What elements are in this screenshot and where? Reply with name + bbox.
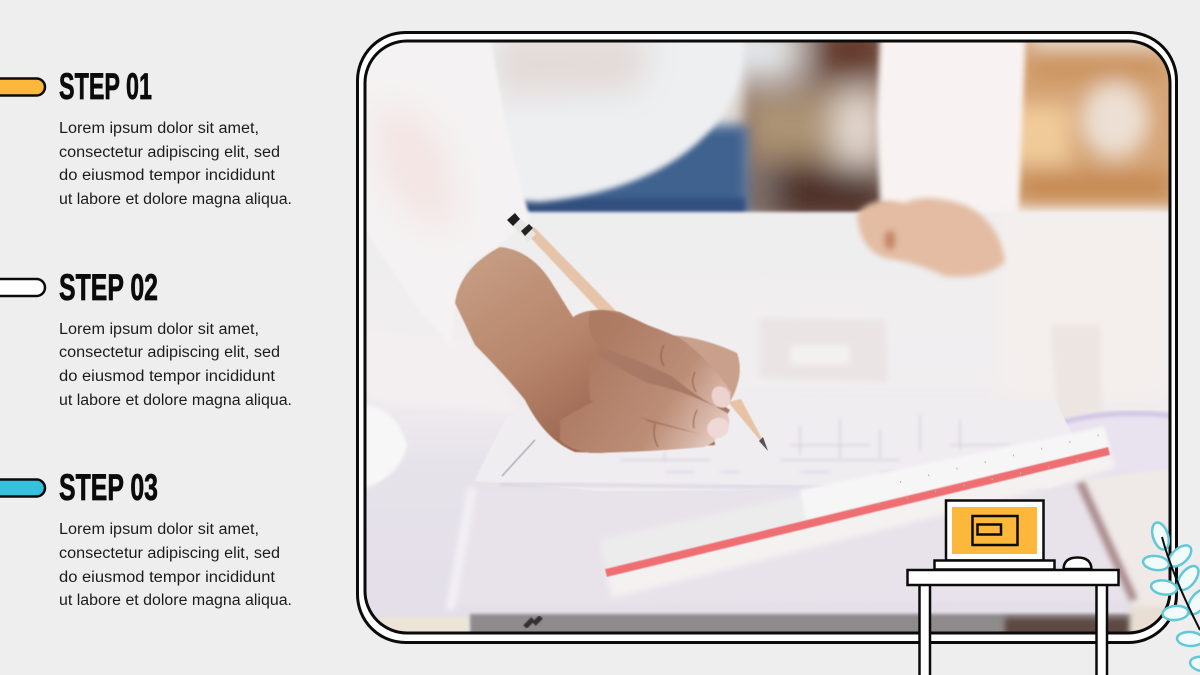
desk legs (920, 584, 1107, 675)
index finger (589, 310, 731, 407)
knuckle creases (654, 345, 697, 447)
inner frame stroke (365, 41, 1170, 633)
forearm and back of hand (455, 247, 715, 453)
torso (506, 42, 743, 206)
photo frame (358, 20, 1180, 642)
step 02 text: do eiusmod tempor incididunt (59, 368, 276, 385)
step 01 heading: STEP 01 (59, 66, 152, 107)
middle finger (590, 365, 730, 437)
step 03 heading: STEP 03 (59, 467, 158, 508)
step 03 text: ut labore et dolore magna aliqua. (59, 592, 292, 609)
step 01 text: Lorem ipsum dolor sit amet, (59, 120, 259, 137)
pencil (507, 213, 768, 451)
step 02 heading: STEP 02 (59, 267, 158, 308)
step 02 text: consectetur adipiscing elit, sed (59, 344, 280, 361)
step 03 pill marker (0, 480, 45, 496)
blurred background room (500, 42, 1168, 214)
laptop base (934, 560, 1054, 570)
mouse (1064, 558, 1092, 569)
ruler (600, 427, 1116, 598)
step 02 text: ut labore et dolore magna aliqua. (59, 392, 292, 409)
rear finger (672, 335, 740, 402)
step 01 text: consectetur adipiscing elit, sed (59, 144, 280, 161)
step 03 text: do eiusmod tempor incididunt (59, 569, 276, 586)
step 01 pill marker (0, 78, 45, 96)
left sheet (365, 330, 520, 412)
step 01 text: ut labore et dolore magna aliqua. (59, 191, 292, 208)
step 02 pill marker (0, 279, 45, 296)
hand (455, 247, 740, 453)
step 03 text (59, 521, 292, 609)
step 01 text (59, 120, 292, 208)
step 02 (0, 267, 292, 409)
drawing sheet (475, 406, 1070, 490)
laptop screen (946, 500, 1044, 560)
white object at left (366, 406, 407, 488)
step 03 text: Lorem ipsum dolor sit amet, (59, 521, 259, 538)
desk top (908, 570, 1118, 585)
right hand blurred (857, 198, 1005, 277)
photo: hand drawing plans on a desk (360, 20, 1180, 640)
blueprint papers (365, 318, 1180, 640)
lower sheet stack (452, 490, 1125, 605)
plant stem (1162, 537, 1200, 630)
lower finger (560, 398, 715, 453)
step 01 text: do eiusmod tempor incididunt (59, 167, 276, 184)
right lower block (1088, 474, 1168, 604)
left sleeve (366, 42, 530, 215)
step 02 text: Lorem ipsum dolor sit amet, (59, 321, 259, 338)
jeans (510, 125, 748, 215)
table surface (365, 212, 1170, 637)
icon: plant leaves (1142, 520, 1200, 673)
right sleeve (877, 30, 1026, 225)
finger shadow (616, 358, 730, 430)
icon: desk with laptop (908, 500, 1118, 675)
step 02 text (59, 321, 292, 409)
step 03 (0, 467, 292, 609)
step 01 (0, 66, 292, 208)
nails (711, 386, 731, 408)
bottom dark strip (468, 612, 1134, 632)
lavender sheet (1056, 412, 1175, 475)
step 03 text: consectetur adipiscing elit, sed (59, 545, 280, 562)
